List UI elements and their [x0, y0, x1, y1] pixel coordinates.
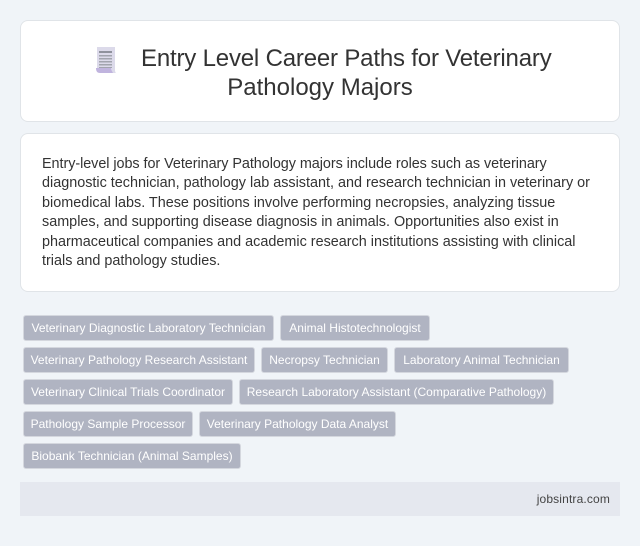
tag: [23, 379, 233, 405]
tag: [23, 411, 193, 437]
paragraph: Entry-level jobs for Veterinary Pathology majors include roles such as veterinary: [42, 156, 547, 172]
tag: [394, 347, 569, 373]
tag: [280, 315, 430, 341]
panel: description text: [20, 133, 620, 292]
icon: document scroll: [96, 47, 116, 73]
tag: Research Laboratory Assistant (Comparative Pathology): [247, 385, 546, 399]
tag: [199, 411, 396, 437]
tag: Veterinary Pathology Data Analyst: [207, 417, 388, 431]
tag: [23, 315, 274, 341]
tag: [23, 443, 241, 469]
heading: Entry Level Career Paths for Veterinary: [141, 45, 552, 72]
panel: job tags: [23, 315, 569, 469]
tag: Veterinary Diagnostic Laboratory Technician: [32, 321, 265, 335]
tag: Veterinary Clinical Trials Coordinator: [31, 385, 225, 399]
tag: Animal Histotechnologist: [289, 321, 421, 335]
tag: Necropsy Technician: [269, 353, 380, 367]
tag: [23, 347, 255, 373]
heading: Pathology Majors: [227, 74, 413, 101]
footer bar: [20, 482, 620, 516]
heading: [141, 45, 552, 101]
tag: Veterinary Pathology Research Assistant: [31, 353, 247, 367]
paragraph: diagnostic technician, pathology lab assistant, and research technician in veterinary or: [42, 175, 590, 191]
paragraph: [42, 156, 590, 269]
tag: Biobank Technician (Animal Samples): [31, 449, 233, 463]
tag: [261, 347, 388, 373]
paragraph: biomedical labs. These positions involve performing necropsies, analyzing tissue: [42, 194, 555, 210]
source label: jobsintra.com: [537, 492, 610, 506]
tag: Pathology Sample Processor: [31, 417, 185, 431]
panel: title card: [20, 20, 620, 122]
paragraph: pharmaceutical companies and academic research institutions assisting with clinical: [42, 234, 576, 250]
paragraph: samples, and supporting disease diagnosis in animals. Opportunities also exist in: [42, 214, 559, 230]
paragraph: trials and pathology studies.: [42, 253, 220, 269]
tag: [239, 379, 554, 405]
tag: Laboratory Animal Technician: [403, 353, 560, 367]
